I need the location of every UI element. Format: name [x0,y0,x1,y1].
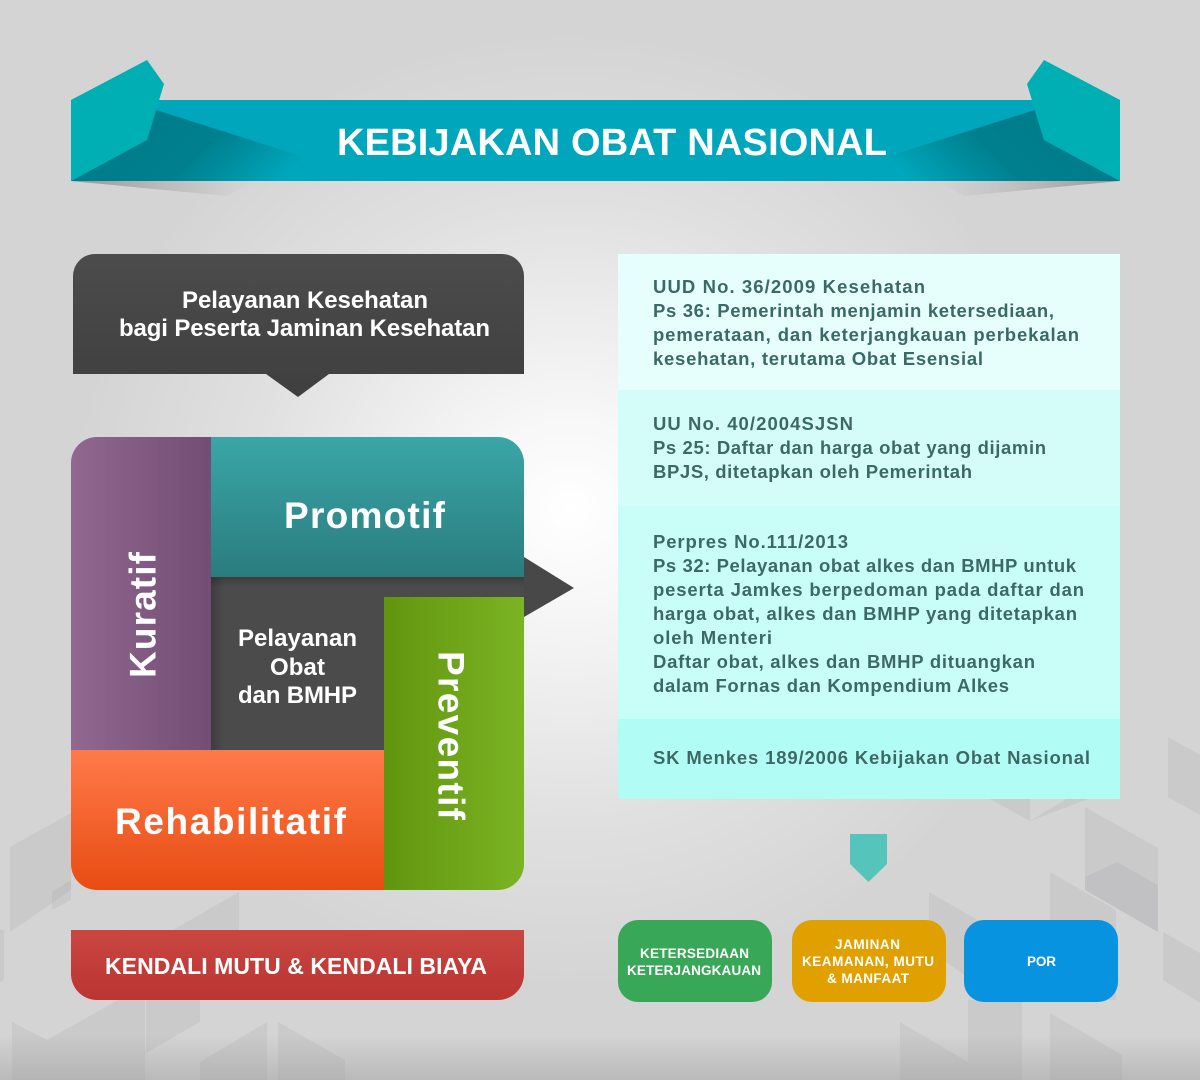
text block: UU 40/2004: Ps 25: Daftar dan harga obat yang dijamin [653,437,1046,458]
text block: UUD 36/2009: Ps 36: Pemerintah menjamin ketersediaan, [653,300,1054,321]
box: jaminan keamanan: JAMINAN [835,937,900,952]
box: ketersediaan: KETERJANGKAUAN [627,963,761,978]
panel: kuratif [71,437,211,750]
arrow: pointing down [850,834,887,882]
box: jaminan keamanan [792,920,946,1002]
title: KEBIJAKAN OBAT NASIONAL [337,122,887,164]
text block: UUD 36/2009: UUD No. 36/2009 Kesehatan [653,276,925,297]
panel: kuratif: Kuratif [122,551,164,678]
box: jaminan keamanan: & MANFAAT [827,971,910,986]
panel: preventif [384,597,524,890]
text block: Perpres 111/2013: Ps 32: Pelayanan obat alkes dan BMHP untuk [653,555,1077,576]
panel: pelayanan obat [211,577,524,750]
panel: promotif: Promotif [284,495,446,536]
text block: UU 40/2004: UU No. 40/2004SJSN [653,413,853,434]
box: POR [964,920,1118,1002]
text block: Perpres 111/2013: Perpres No.111/2013 [653,531,848,552]
callout: pelayanan kesehatan: Pelayanan Kesehatan [182,287,428,314]
callout: pelayanan kesehatan [73,254,524,397]
banner: kendali mutu: KENDALI MUTU & KENDALI BIAYA [105,953,487,979]
text block: UU 40/2004: BPJS, ditetapkan oleh Pemerintah [653,461,972,482]
panel: rehabilitatif: Rehabilitatif [115,801,347,842]
text block: Perpres 111/2013: oleh Menteri [653,627,772,648]
text block: Perpres 111/2013 [618,506,1120,719]
text block: UUD 36/2009: pemerataan, dan keterjangkauan perbekalan [653,324,1079,345]
panel: promotif [211,437,524,577]
text block: Perpres 111/2013: Daftar obat, alkes dan BMHP dituangkan [653,651,1035,672]
text block: Perpres 111/2013: peserta Jamkes berpedoman pada daftar dan [653,579,1084,600]
box: POR: POR [1027,954,1056,969]
text block: UU 40/2004 [618,390,1120,506]
box: jaminan keamanan: KEAMANAN, MUTU [802,954,934,969]
title ribbon [71,60,1120,196]
panel: pelayanan obat: Obat [270,654,325,681]
arrow: pointing right [524,557,574,617]
banner: kendali mutu [71,930,524,1000]
text block: SK Menkes: SK Menkes 189/2006 Kebijakan Obat Nasional [653,747,1090,768]
panel: pelayanan obat: Pelayanan [238,625,357,652]
diagram: pelayanan obat quadrants [71,437,574,890]
box: ketersediaan [618,920,772,1002]
text block: Perpres 111/2013: dalam Fornas dan Kompendium Alkes [653,675,1009,696]
text block: UUD 36/2009: kesehatan, terutama Obat Esensial [653,348,983,369]
panel: pelayanan obat: dan BMHP [238,682,357,709]
text block: SK Menkes [618,719,1120,799]
panel: dasar hukum [618,254,1120,799]
box: ketersediaan: KETERSEDIAAN [640,946,749,961]
callout: pelayanan kesehatan: bagi Peserta Jaminan Kesehatan [119,315,490,342]
text block: UUD 36/2009 [618,254,1120,390]
text block: Perpres 111/2013: harga obat, alkes dan BMHP yang ditetapkan [653,603,1077,624]
panel: preventif: Preventif [430,651,472,821]
panel: rehabilitatif [71,750,384,890]
